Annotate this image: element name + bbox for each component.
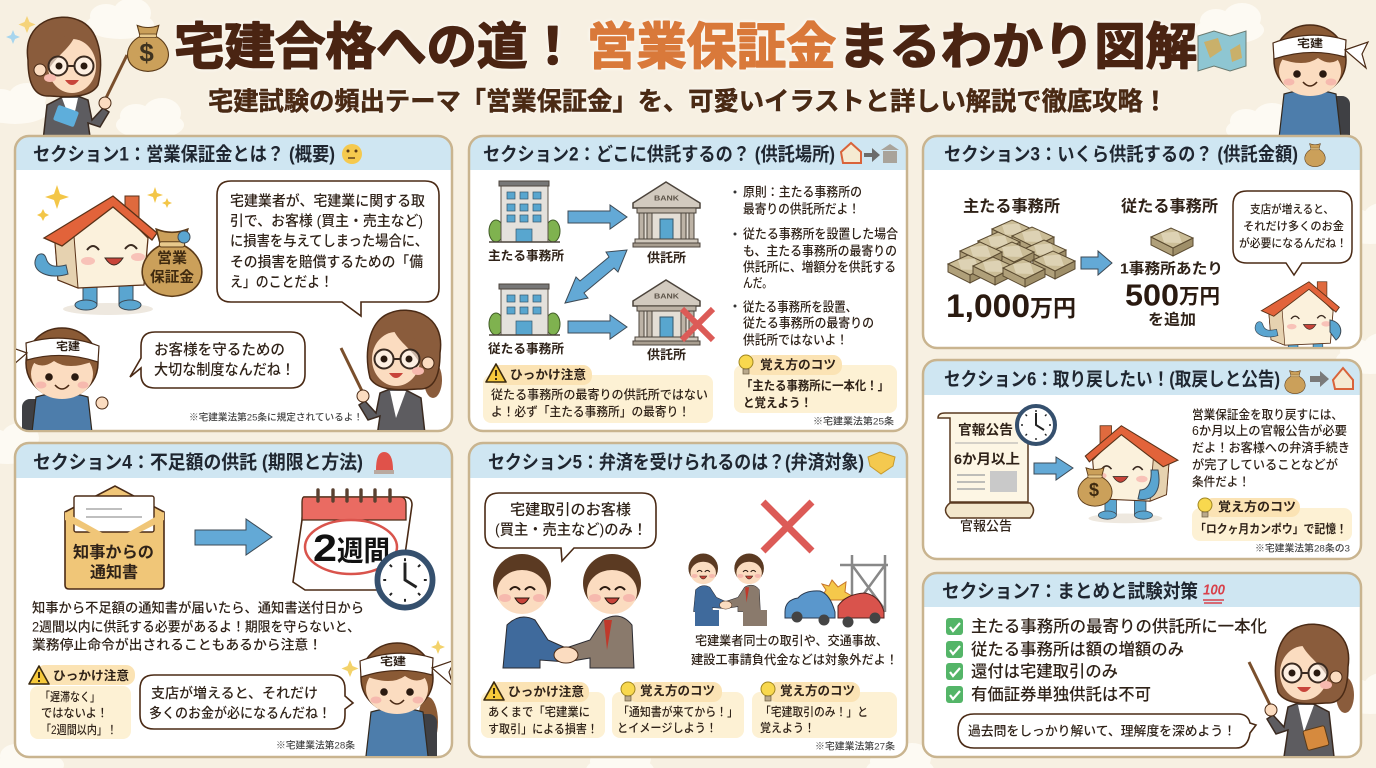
label: を追加 <box>1148 310 1196 328</box>
callout: tip 2: 覚えよう！ <box>760 720 815 735</box>
bullet list: 供託所に、増額分を供託する <box>743 260 896 274</box>
icon: bank: BANK <box>654 194 680 202</box>
callout: warning: 従たる事務所の最寄りの供託所ではない <box>491 387 708 402</box>
double arrow <box>565 250 627 303</box>
bullet list: 従たる事務所を設置、 <box>743 300 857 314</box>
icon: map <box>1198 31 1246 71</box>
speech bubble: student: 大切な制度なんだね！ <box>154 362 295 378</box>
footnote: ※宅建業法第28条 <box>276 740 356 752</box>
heading: セクション5：弁済を受けられるのは？(弁済対象) <box>488 450 864 474</box>
icon: handshake <box>868 452 895 474</box>
icon: bank crossed: BANK <box>654 292 680 300</box>
speech bubble: 宅建取引のお客様 <box>510 502 631 518</box>
callout: warning <box>29 665 135 739</box>
illustration: accident and construction <box>785 555 888 628</box>
arrow <box>568 315 627 339</box>
character: house with bag: $ <box>1089 480 1099 500</box>
label: main office: 主たる事務所 <box>963 196 1060 216</box>
heading: セクション7：まとめと試験対策 <box>942 580 1198 602</box>
explanation text: 6か月以上の官報公告が必要 <box>1192 423 1347 438</box>
character: teacher with book <box>1249 624 1354 757</box>
icon: clock <box>377 552 433 608</box>
panel: section 6 <box>923 360 1361 559</box>
bullet list: 従たる事務所を設置した場合 <box>743 226 898 242</box>
icon: calendar <box>293 490 412 590</box>
panel: section 4 <box>15 443 455 765</box>
amount: 500 <box>1125 278 1220 312</box>
icon: red cross <box>763 502 812 551</box>
icon: envelope <box>65 486 164 589</box>
label: 供託所 <box>647 347 687 362</box>
speech bubble: 多くのお金が必になるんだね！ <box>149 705 331 721</box>
bullet list: 原則：主たる事務所の <box>743 184 862 200</box>
callout: warning: よ！必ず「主たる事務所」の最寄り！ <box>491 404 690 419</box>
subtitle: 宅建試験の頻出テーマ「営業保証金」を、可愛いイラストと詳しい解説で徹底攻略！ <box>208 88 1168 116</box>
explanation text: 2週間以内に供託する必要があるよ！期限を守らないと、 <box>32 618 360 634</box>
label: 主たる事務所 <box>488 248 564 263</box>
bullet list: 従たる事務所の最寄りの <box>743 316 874 330</box>
icon: branch office <box>489 284 560 335</box>
footnote: ※宅建業法第25条 <box>813 416 895 428</box>
character: student top right <box>1273 25 1368 147</box>
speech bubble: 過去問をしっかり解いて、理解度を深めよう！ <box>968 724 1236 738</box>
icon: bank <box>633 182 700 247</box>
label: 従たる事務所 <box>488 341 564 356</box>
character: teacher top left <box>6 16 127 150</box>
explanation text <box>1192 407 1350 489</box>
footnote: ※宅建業法第25条に規定されているよ！ <box>189 412 363 424</box>
icon: siren <box>374 452 394 474</box>
icon: main office <box>489 181 560 242</box>
headband label top right: 宅建 <box>1297 36 1323 50</box>
icon: 100 points: 100 <box>1203 582 1226 598</box>
bullet list: 供託所ではないよ！ <box>743 332 848 348</box>
icon: gazette scroll: 6か月以上 <box>954 451 1020 467</box>
panel: section 1 <box>4 136 452 450</box>
icon: bank crossed <box>633 280 713 345</box>
illustration: handshake <box>493 554 641 668</box>
callout: tip: 覚え方のコツ <box>1218 499 1296 514</box>
callout: tip <box>734 355 897 413</box>
heading: セクション6：取り戻したい！(取戻しと公告) <box>944 368 1280 390</box>
callout: tip 1: 「通知書が来てから！」 <box>618 704 738 719</box>
callout: tip: と覚えよう！ <box>743 395 812 410</box>
heading: セクション3：いくら供託するの？ (供託金額) <box>944 144 1298 166</box>
arrow <box>568 205 627 229</box>
icon: clock <box>1017 406 1055 444</box>
checklist: 従たる事務所は額の増額のみ <box>971 640 1184 659</box>
callout: tip: 覚え方のコツ <box>760 357 836 372</box>
checklist: 主たる事務所の最寄りの供託所に一本化 <box>971 617 1267 636</box>
amount: 500: 500 <box>1125 278 1179 312</box>
icon: guarantee bag: 保証金 <box>150 268 195 286</box>
bullet list: 最寄りの供託所だよ！ <box>743 202 860 216</box>
callout: tip <box>1192 498 1352 541</box>
callout: warning: ひっかけ注意 <box>510 367 586 382</box>
speech bubble: explanation: 宅建業者が、宅建業に関する取 <box>230 192 425 210</box>
icon: bag <box>1305 144 1325 167</box>
callout: tip: 「主たる事務所に一本化！」 <box>741 378 889 393</box>
title <box>128 19 1246 75</box>
icon: gazette scroll <box>938 413 1034 518</box>
callout: tip 1 <box>612 682 744 738</box>
speech bubble <box>485 493 656 561</box>
icon: calendar: 2 <box>313 528 337 570</box>
callout: tip: 「ロクヶ月カンポウ」で記憶！ <box>1195 521 1347 536</box>
bullet list: も、主たる事務所の最寄りの <box>743 244 897 258</box>
icon: money pile <box>948 220 1075 287</box>
speech bubble: explanation: え」のことだよ！ <box>230 274 333 291</box>
footnote: ※宅建業法第27条 <box>815 740 896 752</box>
icon: gazette scroll: 官報公告 <box>958 422 1013 438</box>
heading: セクション4：不足額の供託 (期限と方法) <box>33 450 363 474</box>
checklist <box>946 617 1267 704</box>
callout: tip 2: 覚え方のコツ <box>780 683 855 698</box>
arrow <box>1034 457 1073 480</box>
headband label: 宅建 <box>56 339 80 353</box>
label: 1事務所あたり <box>1120 260 1223 278</box>
explanation text: 営業保証金を取り戻すには、 <box>1192 407 1343 422</box>
character: house mascot <box>35 196 157 315</box>
bullet list <box>734 184 898 348</box>
explanation text: 業務停止命令が出されることもあるから注意！ <box>32 636 322 652</box>
amount: 1000: 1,000 <box>946 288 1030 324</box>
label: branch office: 従たる事務所 <box>1121 196 1218 216</box>
arrow <box>195 519 272 555</box>
icon: money bundle <box>1151 228 1193 256</box>
callout: tip 2: 「宅建取引のみ！」と <box>760 704 868 719</box>
amount: 500: 万円 <box>1179 286 1220 308</box>
explanation text <box>691 633 898 667</box>
speech bubble: explanation: その損害を賠償するための「備 <box>230 254 423 271</box>
callout: warning: あくまで「宅建業に <box>488 704 590 719</box>
panel: section 5 <box>469 443 907 757</box>
character: student <box>16 327 108 430</box>
speech bubble <box>1233 191 1352 275</box>
title text dark end: まるわかり図解 <box>838 19 1197 75</box>
title text dark: 宅建合格への道！ <box>174 19 578 75</box>
character: student girl <box>342 640 451 756</box>
arrow <box>1081 251 1112 275</box>
explanation text: 宅建業者同士の取引や、交通事故、 <box>695 633 888 648</box>
callout: warning: 「2週間以内」！ <box>41 722 117 737</box>
amount: 1000: 万円 <box>1030 295 1076 321</box>
footnote: ※宅建業法第28条の3 <box>1255 542 1350 554</box>
icon: money bag: $ <box>139 39 154 67</box>
heading: セクション2：どこに供託するの？ (供託場所) <box>483 144 835 166</box>
amount: 1000 <box>946 288 1076 324</box>
panel: section 3 <box>923 136 1361 364</box>
speech bubble: student <box>130 332 305 388</box>
icon: money bag <box>128 25 168 71</box>
sparkles <box>37 185 172 221</box>
panel: section 2 <box>469 136 907 431</box>
callout: tip 2 <box>752 682 897 738</box>
speech bubble: explanation: に損害を与えてしまった場合に、 <box>230 233 428 250</box>
explanation text: 建設工事請負代金などは対象外だよ！ <box>691 652 898 667</box>
character: house <box>1254 281 1342 347</box>
icon: calendar: 週間 <box>337 536 390 566</box>
icons: house to bank <box>841 143 899 163</box>
icon: envelope: 知事からの <box>73 542 154 562</box>
icon: guarantee bag <box>142 229 202 296</box>
explanation text: だよ！お客様への弁済手続き <box>1192 440 1350 455</box>
speech bubble: 支店が増えると、 <box>1250 202 1334 216</box>
checklist: 還付は宅建取引のみ <box>971 662 1118 681</box>
checklist: 有価証券単独供託は不可 <box>971 685 1151 704</box>
character: teacher <box>341 310 442 443</box>
speech bubble: 支店が増えると、それだけ <box>151 685 318 701</box>
character: house with bag <box>1078 426 1178 523</box>
explanation text: が完了していることなどが <box>1192 457 1338 472</box>
illustration: business partners <box>688 554 767 626</box>
explanation text: 知事から不足額の通知書が届いたら、通知書送付日から <box>32 600 364 616</box>
icon: thinking face <box>342 144 362 164</box>
label: 供託所 <box>647 250 687 265</box>
speech bubble: それだけ多くのお金 <box>1243 219 1344 233</box>
speech bubble <box>140 675 353 729</box>
callout: warning <box>481 682 605 738</box>
icon: envelope: 通知書 <box>90 562 138 582</box>
callout: warning: ではないよ！ <box>41 706 108 720</box>
speech bubble: が必要になるんだね！ <box>1239 236 1347 250</box>
speech bubble: explanation: 引で、お客様 (買主・売主など) <box>230 213 423 230</box>
callout: warning: ひっかけ注意 <box>508 684 584 699</box>
callout: tip 1: とイメージしよう！ <box>617 721 717 735</box>
callout: warning <box>483 364 713 423</box>
callout: warning: 「遅滞なく」 <box>40 689 100 704</box>
speech bubble: (買主・売主など)のみ！ <box>495 522 647 538</box>
bullet list: んだ。 <box>743 276 772 290</box>
callout: tip 1: 覚え方のコツ <box>640 683 715 698</box>
headband label: 宅建 <box>380 654 406 668</box>
panel: section 7 <box>923 573 1361 757</box>
title text orange: 営業保証金 <box>587 19 836 75</box>
icon: guarantee bag: 営業 <box>157 249 188 267</box>
speech bubble: student: お客様を守るための <box>154 342 285 358</box>
icons: bag to house <box>1285 368 1353 394</box>
speech bubble: explanation <box>217 181 439 316</box>
explanation text <box>32 600 364 652</box>
label: 官報公告 <box>960 518 1012 534</box>
explanation text: 条件だよ！ <box>1192 474 1250 489</box>
heading: セクション1：営業保証金とは？ (概要) <box>33 144 335 166</box>
speech bubble <box>958 714 1256 748</box>
callout: warning: す取引」による損害！ <box>488 721 598 736</box>
callout: warning: ひっかけ注意 <box>53 668 129 683</box>
